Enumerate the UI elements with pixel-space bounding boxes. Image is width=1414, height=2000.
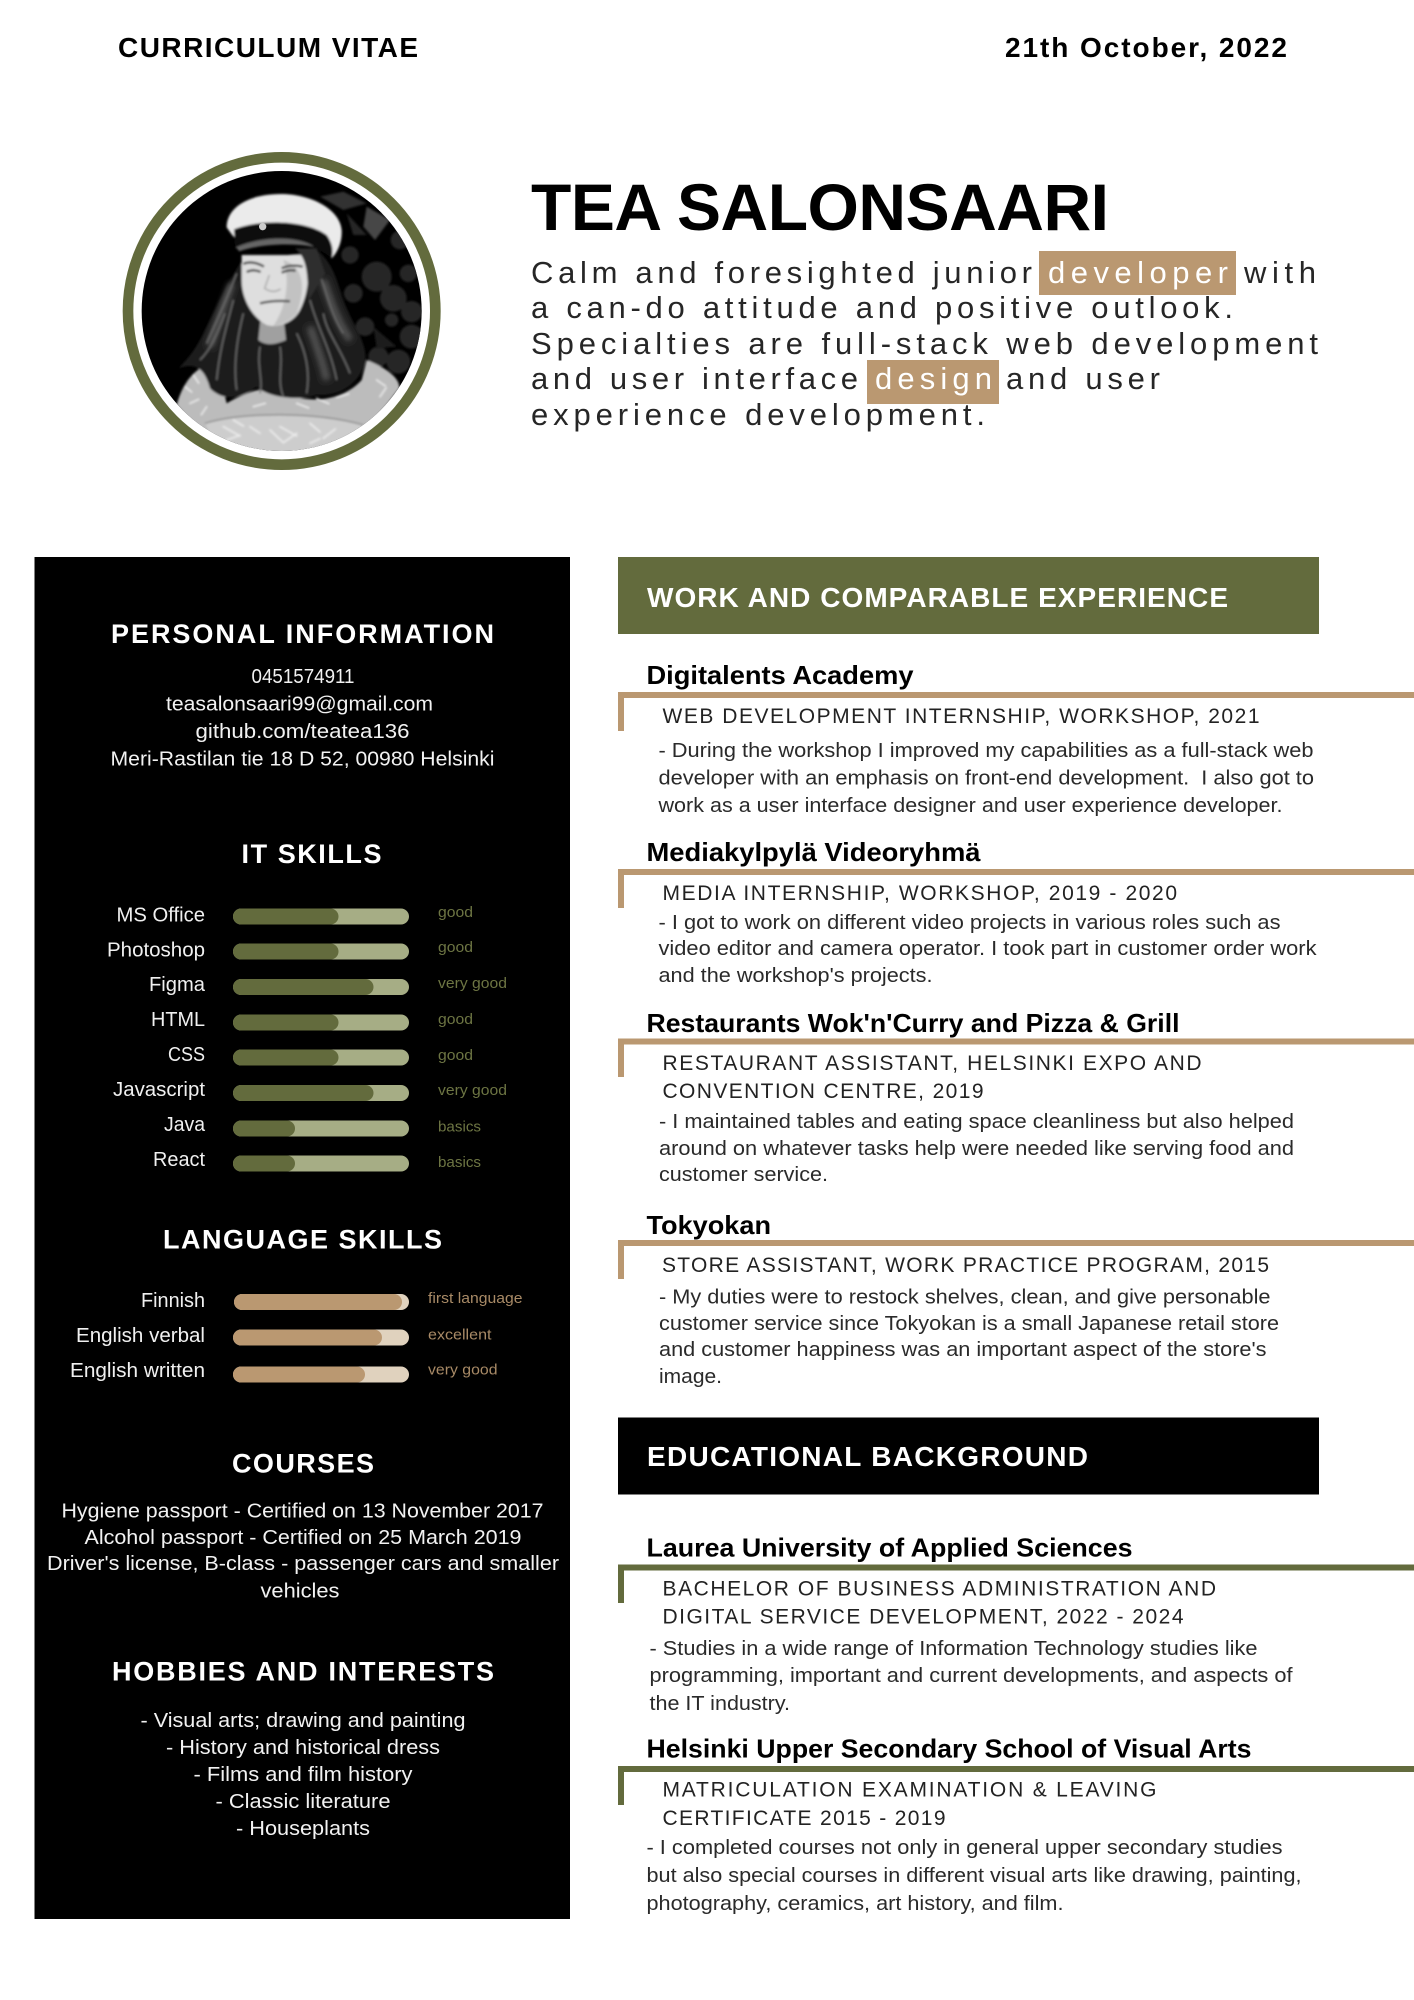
job: Mediakylpylä Videoryhmä: - I got to work on different video projects in various roles such as — [658, 912, 1280, 934]
language: English written: very good — [428, 1362, 498, 1378]
education: Helsinki Upper Secondary School: MATRICULATION EXAMINATION & LEAVING — [662, 1778, 1156, 1802]
job: Tokyokan — [618, 1210, 1414, 1388]
job: Restaurants Wok'n'Curry and Pizza & Grill: RESTAURANT ASSISTANT, HELSINKI EXPO AND — [662, 1052, 1202, 1075]
sidebar background — [34, 557, 570, 1919]
intro paragraph: with — [1243, 255, 1316, 290]
job: Tokyokan: image. — [659, 1366, 722, 1388]
courses: vehicles — [260, 1580, 340, 1602]
education: Laurea University — [618, 1532, 1414, 1715]
job: Restaurants Wok'n'Curry and Pizza & Grill: Restaurants Wok'n'Curry and Pizza & Grill — [646, 1008, 1180, 1038]
profile photo with ring — [128, 157, 435, 465]
language: English verbal: excellent — [428, 1326, 492, 1344]
education: Laurea University: programming, important and current developments, and aspects of — [650, 1665, 1293, 1687]
skill: Javascript — [113, 1079, 507, 1101]
job: Tokyokan: STORE ASSISTANT, WORK PRACTICE PROGRAM, 2015 — [662, 1254, 1269, 1277]
job: Restaurants Wok'n'Curry and Pizza & Grill: - I maintained tables and eating space cleanliness but also helped — [659, 1111, 1294, 1133]
intro paragraph: and user interface — [531, 361, 858, 396]
language: Finnish: Finnish — [141, 1290, 205, 1312]
courses: Driver's license, B-class - passenger cars and smaller — [47, 1553, 559, 1575]
intro paragraph: a can-do attitude and positive outlook. — [531, 290, 1233, 325]
job: Digitalents Academy — [618, 660, 1414, 817]
education: Laurea University: the IT industry. — [650, 1693, 790, 1715]
job: Digitalents Academy: WEB DEVELOPMENT INTERNSHIP, WORKSHOP, 2021 — [662, 705, 1260, 728]
education: Helsinki Upper Secondary School: photography, ceramics, art history, and film. — [646, 1893, 1064, 1915]
job: Tokyokan: Tokyokan — [646, 1210, 771, 1240]
it skills chart: IT SKILLS — [242, 839, 382, 869]
skill: Javascript: Javascript — [113, 1079, 205, 1101]
courses — [47, 1448, 559, 1602]
personal information: 0451574911 — [252, 666, 354, 688]
job: Mediakylpylä Videoryhmä — [618, 837, 1414, 987]
personal information: github.com/teatea136 — [196, 721, 410, 743]
skill: Figma — [149, 974, 507, 996]
skill: Java — [164, 1114, 481, 1136]
header label: curriculum vitae: CURRICULUM VITAE — [118, 32, 418, 63]
skill: Photoshop — [107, 939, 473, 962]
language: English verbal: English verbal — [76, 1325, 205, 1347]
personal information: Meri-Rastilan tie 18 D 52, 00980 Helsinki — [110, 748, 494, 770]
job: Digitalents Academy: developer with an emphasis on front-end development. I also got to — [658, 768, 1314, 790]
section header: work experience — [618, 557, 1319, 634]
hobbies and interests: - Classic literature — [216, 1791, 390, 1813]
intro paragraph: design — [875, 361, 992, 396]
skill: MS Office: good — [438, 904, 473, 921]
education: Laurea University: Laurea University of Applied Sciences — [646, 1532, 1132, 1562]
skill: CSS — [168, 1044, 473, 1066]
hobbies and interests: - Visual arts; drawing and painting — [140, 1710, 466, 1732]
skill: HTML: HTML — [151, 1009, 205, 1031]
skill: React: basics — [438, 1154, 481, 1171]
education: Helsinki Upper Secondary School: but also special courses in different visual arts like drawing, painting, — [646, 1865, 1302, 1887]
skill: MS Office — [116, 904, 473, 926]
personal information: teasalonsaari99@gmail.com — [166, 694, 433, 716]
intro paragraph: Specialties are full-stack web development — [531, 326, 1318, 361]
skill: CSS: CSS — [168, 1044, 205, 1066]
section header: education: EDUCATIONAL BACKGROUND — [647, 1441, 1088, 1472]
name heading: TEA SALONSAARI — [531, 170, 1109, 244]
it skills chart — [107, 839, 507, 1172]
skill: Photoshop: Photoshop — [107, 940, 205, 962]
job: Digitalents Academy: work as a user interface designer and user experience developer. — [657, 795, 1282, 817]
job: Tokyokan: customer service since Tokyokan is a small Japanese retail store — [659, 1313, 1279, 1335]
intro paragraph — [531, 251, 1318, 432]
language: English written — [70, 1360, 498, 1382]
section header: education — [618, 1418, 1319, 1494]
courses: Hygiene passport - Certified on 13 November 2017 — [62, 1500, 544, 1522]
job: Mediakylpylä Videoryhmä: and the workshop's projects. — [658, 965, 932, 987]
job: Restaurants Wok'n'Curry and Pizza & Grill: around on whatever tasks help were needed like serving food and — [659, 1138, 1294, 1160]
job: Restaurants Wok'n'Curry and Pizza & Grill: customer service. — [659, 1164, 828, 1186]
education: Laurea University: BACHELOR OF BUSINESS ADMINISTRATION AND — [662, 1578, 1216, 1600]
language: Finnish: first language — [428, 1290, 522, 1307]
skill: MS Office: MS Office — [116, 904, 205, 926]
intro paragraph: developer — [1048, 255, 1228, 290]
skill: Java: Java — [164, 1114, 206, 1136]
skill: HTML — [151, 1009, 473, 1031]
header date: 21th October, 2022 — [1005, 32, 1287, 63]
skill: HTML: good — [438, 1011, 473, 1028]
job: Restaurants Wok'n'Curry and Pizza & Grill — [618, 1008, 1414, 1186]
courses: COURSES — [232, 1448, 374, 1478]
hobbies and interests: HOBBIES AND INTERESTS — [112, 1656, 494, 1686]
education: Laurea University: - Studies in a wide range of Information Technology studies like — [650, 1638, 1258, 1660]
language: English verbal — [76, 1325, 492, 1347]
education: Laurea University: DIGITAL SERVICE DEVELOPMENT, 2022 - 2024 — [662, 1606, 1184, 1628]
hobbies and interests — [112, 1656, 494, 1840]
education: Helsinki Upper Secondary School — [618, 1734, 1414, 1915]
job: Restaurants Wok'n'Curry and Pizza & Grill: CONVENTION CENTRE, 2019 — [662, 1080, 984, 1103]
section header: work experience: WORK AND COMPARABLE EXPERIENCE — [647, 582, 1228, 613]
skill: Javascript: very good — [438, 1082, 507, 1099]
highlight: developer — [1039, 251, 1236, 295]
courses: Alcohol passport - Certified on 25 March 2019 — [84, 1527, 522, 1549]
personal information: PERSONAL INFORMATION — [111, 619, 494, 649]
skill: Figma: Figma — [149, 974, 206, 996]
personal information — [110, 619, 494, 770]
job: Digitalents Academy: - During the workshop I improved my capabilities as a full-stack web — [658, 740, 1314, 762]
hobbies and interests: - Houseplants — [236, 1818, 370, 1840]
language skills chart — [70, 1224, 522, 1382]
job: Mediakylpylä Videoryhmä: video editor and camera operator. I took part in customer order work — [658, 938, 1318, 960]
job: Digitalents Academy: Digitalents Academy — [646, 660, 914, 690]
language: Finnish — [141, 1290, 522, 1312]
skill: Photoshop: good — [438, 939, 473, 956]
job: Tokyokan: and customer happiness was an important aspect of the store's — [659, 1339, 1266, 1361]
hobbies and interests: - Films and film history — [194, 1764, 412, 1786]
skill: CSS: good — [438, 1047, 473, 1064]
skill: React — [153, 1149, 481, 1172]
skill: React: React — [153, 1149, 205, 1171]
job: Mediakylpylä Videoryhmä: Mediakylpylä Videoryhmä — [646, 837, 981, 867]
job: Tokyokan: - My duties were to restock shelves, clean, and give personable — [659, 1286, 1270, 1308]
language: English written: English written — [70, 1360, 205, 1382]
language skills chart: LANGUAGE SKILLS — [163, 1224, 442, 1254]
job: Mediakylpylä Videoryhmä: MEDIA INTERNSHIP, WORKSHOP, 2019 - 2020 — [662, 882, 1177, 905]
education: Helsinki Upper Secondary School: CERTIFICATE 2015 - 2019 — [662, 1807, 946, 1830]
skill: Java: basics — [438, 1118, 481, 1136]
panel: left sidebar — [34, 557, 570, 1919]
intro paragraph: and user — [1006, 361, 1160, 396]
highlight: design — [867, 360, 999, 404]
skill: Figma: very good — [438, 975, 507, 992]
education: Helsinki Upper Secondary School: - I completed courses not only in general upper secondary studies — [646, 1837, 1282, 1859]
education: Helsinki Upper Secondary School: Helsinki Upper Secondary School of Visual Arts — [646, 1734, 1252, 1764]
intro paragraph: experience development. — [531, 397, 985, 432]
hobbies and interests: - History and historical dress — [166, 1737, 440, 1759]
intro paragraph: Calm and foresighted junior — [531, 255, 1032, 290]
